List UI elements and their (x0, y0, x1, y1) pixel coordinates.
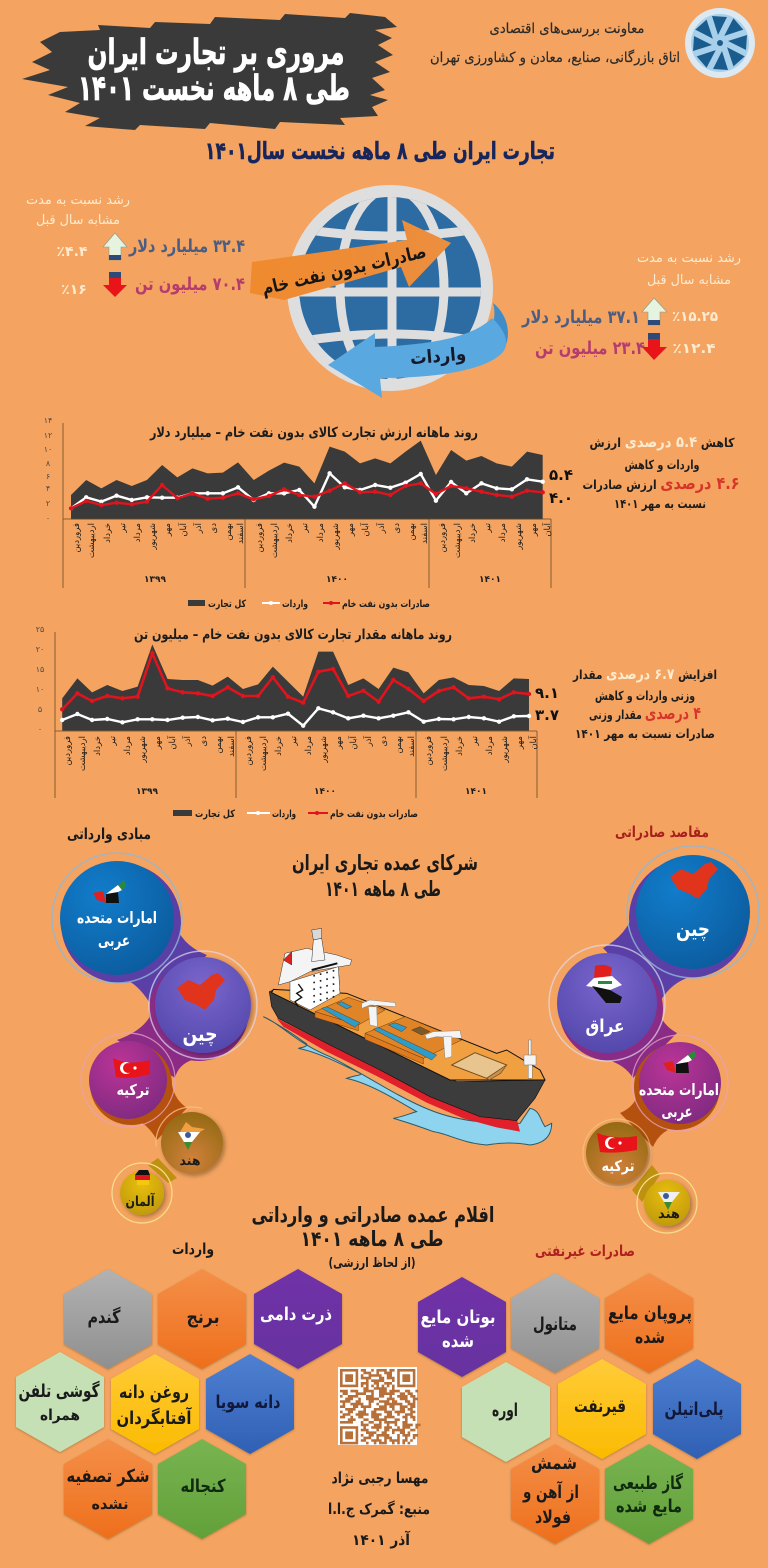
month labels: خرداد (455, 736, 465, 756)
y axis labels (44, 416, 52, 523)
month labels: اسفند (236, 523, 246, 544)
panel: import stats (521, 251, 741, 360)
panel: export stats: ۷۰.۴ میلیون تن (135, 274, 245, 295)
text block: value commentary: واردات و کاهش (624, 457, 700, 472)
bubble: Turkey: ترکیه (116, 1081, 150, 1099)
superstructure (278, 928, 352, 1010)
hexagon: raw sugar: نشده (92, 1495, 128, 1513)
panel: export stats: ٪۱۶ (61, 282, 87, 298)
text block: credits (328, 1469, 430, 1549)
heading: trade partners (292, 851, 478, 901)
heading: imports: واردات (172, 1240, 214, 1258)
heading: import sources: مبادی وارداتی (67, 825, 151, 843)
month labels: اسفند (407, 736, 417, 757)
month labels: خرداد (274, 736, 284, 756)
panel: import stats: ۳۷.۱ میلیارد دلار (521, 307, 640, 328)
y axis labels: ۲ (46, 499, 50, 508)
text block: credits: مهسا رجبی نژاد (332, 1469, 428, 1487)
arrow: imports (328, 303, 508, 398)
y axis labels: ۸ (46, 459, 51, 468)
panel: export stats (26, 193, 245, 298)
text block: credits: منبع: گمرک ج.ا.ا (328, 1500, 430, 1518)
hexagon: meal: کنجاله (180, 1476, 226, 1497)
month labels: بهمن (214, 736, 224, 754)
year labels: ۱۴۰۰ (314, 787, 336, 797)
panel: import hexagons (16, 1269, 342, 1539)
chart title: روند ماهانه ارزش تجارت کالای بدون نفت خام – میلیارد دلار (149, 425, 478, 441)
month labels: مرداد (498, 523, 508, 542)
chart: monthly trade value (44, 416, 573, 610)
month labels: شهریور (319, 736, 329, 764)
text block: credits: آذر ۱۴۰۱ (352, 1531, 411, 1549)
heading: trade partners: طی ۸ ماهه ۱۴۰۱ (325, 877, 441, 901)
bubble: UAE: امارات متحده (77, 908, 157, 927)
bubble: India (637, 1173, 697, 1233)
y axis labels: ۲۵ (36, 625, 44, 634)
month labels: مهر (153, 736, 163, 750)
month labels: خرداد (103, 523, 113, 543)
bubble: Turkey (583, 1119, 651, 1187)
icon: globe (280, 185, 500, 391)
year labels: ۱۳۹۹ (144, 575, 166, 585)
end values: ۵.۴ (549, 466, 573, 484)
month labels: آذر (181, 735, 193, 747)
bubble: UAE (632, 1035, 728, 1131)
hexagon: steel: شمش (531, 1453, 577, 1474)
bubble: India: هند (658, 1207, 680, 1222)
month labels: مرداد (485, 736, 495, 755)
chart title: روند ماهانه مقدار تجارت کالای بدون نفت خام – میلیون تن (134, 627, 452, 643)
month labels: اردیبهشت (78, 736, 88, 771)
month labels: مرداد (123, 736, 133, 755)
panel: export stats: رشد نسبت به مدت (26, 193, 130, 208)
text block: volume commentary: ۴ درصدی مقدار وزنی (589, 704, 701, 724)
y axis labels (36, 625, 44, 734)
month labels: فروردین (63, 736, 73, 766)
hexagon: mobile phone: همراه (40, 1406, 80, 1424)
hexagon: feed corn (254, 1269, 342, 1369)
legend: واردات (272, 809, 296, 820)
month labels: مهر (334, 736, 344, 750)
year labels (136, 787, 487, 797)
month labels: مرداد (316, 523, 326, 542)
year labels (144, 575, 501, 585)
text block: volume commentary: افزایش ۶.۷ درصدی مقدار (572, 665, 717, 683)
end values: ۴.۰ (549, 489, 573, 507)
hexagon: methanol: متانول (533, 1314, 577, 1335)
hexagon: sunflower oil (111, 1354, 199, 1454)
month labels: آذر (192, 522, 204, 534)
bubble: UAE (52, 853, 182, 983)
year labels: ۱۴۰۱ (479, 575, 501, 585)
text block: value commentary: ۴.۶ درصدی ارزش صادرات (582, 474, 740, 494)
month labels: مهر (515, 736, 525, 750)
hexagon: mobile phone: گوشی تلفن (18, 1380, 100, 1402)
month labels: بهمن (224, 523, 234, 541)
y axis labels: ۱۵ (36, 665, 44, 674)
month labels: مرداد (304, 736, 314, 755)
legend: صادرات بدون نفت خام (330, 809, 418, 820)
heading: top goods: طی ۸ ماهه ۱۴۰۱ (300, 1227, 444, 1251)
month labels: اردیبهشت (259, 736, 269, 771)
QR code (338, 1367, 421, 1445)
hexagon: meal (158, 1439, 246, 1539)
arrow: imports: واردات (409, 344, 467, 369)
month labels (72, 522, 553, 558)
bubble: Iraq (549, 945, 665, 1061)
text block: volume commentary: وزنی واردات و کاهش (595, 688, 695, 703)
hexagon: LNG: گاز طبیعی (613, 1472, 683, 1494)
panel: import source bubbles (52, 853, 257, 1223)
hexagon: feed corn: ذرت دامی (260, 1304, 332, 1325)
hexagon: steel (511, 1444, 599, 1544)
heading: top goods: (از لحاظ ارزشی) (328, 1256, 416, 1271)
month labels: خرداد (285, 523, 295, 543)
month labels: آبان (347, 735, 359, 750)
panel: import stats: ٪۱۵.۲۵ (672, 309, 718, 325)
title banner (22, 13, 397, 130)
y axis labels: ۱۰ (44, 445, 52, 454)
title banner: مروری بر تجارت ایران (88, 33, 344, 73)
hexagon: propane (605, 1273, 693, 1373)
hexagon: rice (158, 1269, 246, 1369)
bubble: China: چین (676, 917, 710, 941)
month labels: اردیبهشت (440, 736, 450, 771)
month labels: دی (199, 736, 209, 746)
hexagon: wheat: گندم (88, 1306, 121, 1328)
month labels: آبان (527, 735, 539, 750)
month labels: آذر (362, 735, 374, 747)
y axis labels: ۱۴ (44, 416, 52, 425)
month labels: مهر (163, 523, 173, 537)
heading: export destinations: مقاصد صادراتی (615, 823, 709, 841)
bubble: UAE: عربی (98, 931, 130, 950)
year labels: ۱۴۰۱ (465, 787, 487, 797)
bubble: India: هند (180, 1154, 200, 1169)
hexagon: polyethylene (653, 1359, 741, 1459)
month labels: دی (209, 523, 219, 533)
month labels: بهمن (407, 523, 417, 541)
month labels: شهریور (500, 736, 510, 764)
icon: down arrow (642, 333, 667, 360)
text block: value commentary: نسبت به مهر ۱۴۰۱ (614, 496, 706, 511)
chart: monthly trade volume (36, 625, 559, 820)
year labels: ۱۳۹۹ (136, 787, 158, 797)
month labels: فروردین (438, 523, 448, 553)
bubble: Germany: آلمان (126, 1192, 155, 1210)
month labels: آبان (359, 522, 371, 537)
end values: ۹.۱ (535, 684, 559, 702)
hexagon: propane: پروپان مایع (608, 1303, 692, 1324)
bubble: India (153, 1104, 231, 1182)
y axis labels: ۶ (46, 472, 50, 481)
hexagon: LNG: مایع شده (616, 1496, 682, 1517)
month labels: مهر (529, 523, 539, 537)
end values (535, 684, 559, 724)
illustration: cargo ship (263, 928, 552, 1145)
hexagon: butane: شده (442, 1331, 474, 1352)
month labels: شهریور (331, 523, 341, 551)
year labels: ۱۴۰۰ (326, 575, 348, 585)
month labels: شهریور (148, 523, 158, 551)
hexagon: raw sugar: شکر تصفیه (66, 1466, 150, 1487)
legend (188, 599, 430, 610)
panel: import stats: رشد نسبت به مدت (637, 251, 741, 266)
hexagon: methanol (511, 1273, 599, 1373)
hexagon: butane (418, 1277, 506, 1377)
hexagon: steel: فولاد (535, 1507, 571, 1528)
hexagon: LNG (605, 1444, 693, 1544)
title banner: طی ۸ ماهه نخست ۱۴۰۱ (78, 69, 350, 109)
month labels: فروردین (424, 736, 434, 766)
hexagon: propane: شده (635, 1327, 665, 1348)
panel: import stats: ۲۳.۴ میلیون تن (535, 338, 645, 359)
bubble: Germany (112, 1163, 172, 1223)
month labels: آذر (375, 522, 387, 534)
bubble: Turkey: ترکیه (602, 1157, 634, 1175)
bubble: China (149, 951, 257, 1059)
panel: export stats: ۳۲.۴ میلیارد دلار (128, 236, 245, 257)
bubble: China (627, 846, 759, 978)
heading: non-oil exports: صادرات غیرنفتی (535, 1242, 635, 1260)
month labels: تیر (289, 735, 299, 747)
heading: trade partners: شرکای عمده تجاری ایران (292, 851, 478, 875)
hexagon: polyethylene: پلی‌اتیلن (664, 1399, 724, 1420)
y axis labels: ۲۰ (36, 645, 44, 654)
end values (549, 466, 573, 507)
panel: export hexagons (418, 1273, 741, 1544)
hexagon: urea: اوره (492, 1400, 518, 1421)
month labels: اسفند (420, 523, 430, 544)
text block: volume commentary: صادرات نسبت به مهر ۱۴۰۱ (575, 726, 715, 741)
cranes (362, 1000, 462, 1058)
heading: top goods (252, 1203, 494, 1271)
text block: value commentary: کاهش ۵.۴ درصدی ارزش (590, 433, 735, 451)
month labels: تیر (300, 522, 310, 534)
hexagon: soybean: دانه سویا (216, 1392, 280, 1413)
month labels: مهر (346, 523, 356, 537)
y axis labels: ۵ (38, 705, 42, 714)
hexagon: rice: برنج (186, 1307, 220, 1328)
month labels: دی (392, 523, 402, 533)
month labels: فروردین (255, 523, 265, 553)
month labels: خرداد (468, 523, 478, 543)
month labels: اردیبهشت (453, 523, 463, 558)
containers (315, 997, 462, 1064)
hexagon: butane: بوتان مایع (420, 1307, 496, 1328)
month labels: خرداد (93, 736, 103, 756)
month labels: آبان (177, 522, 189, 537)
bubble: Iraq: عراق (586, 1016, 624, 1037)
bubble: China: چین (182, 1022, 218, 1046)
month labels: تیر (118, 522, 128, 534)
month labels: تیر (483, 522, 493, 534)
hexagon: wheat (64, 1269, 152, 1369)
icon: up arrow (103, 233, 127, 260)
y axis labels: ۴ (46, 484, 50, 493)
icon: up arrow (642, 298, 667, 325)
month labels: بهمن (394, 736, 404, 754)
hexagon: urea (462, 1362, 550, 1462)
legend: صادرات بدون نفت خام (342, 599, 430, 610)
month labels: مرداد (133, 523, 143, 542)
panel: import stats: ٪۱۲.۴ (672, 341, 716, 357)
hexagon: sunflower oil: آفتابگردان (116, 1406, 192, 1429)
text block: value commentary (582, 433, 740, 511)
month labels: آبان (541, 522, 553, 537)
month labels: شهریور (138, 736, 148, 764)
y axis labels: ۱۲ (44, 431, 52, 440)
month labels: اسفند (227, 736, 237, 757)
organization heading: معاونت بررسی‌های اقتصادی (490, 21, 644, 37)
hatch (452, 1053, 507, 1078)
arrow: exports: صادرات بدون نفت خام (260, 241, 428, 300)
month labels: شهریور (514, 523, 524, 551)
month labels: آبان (166, 735, 178, 750)
subtitle: تجارت ایران طی ۸ ماهه نخست سال۱۴۰۱ (205, 137, 555, 165)
month labels: اردیبهشت (87, 523, 97, 558)
month labels: اردیبهشت (270, 523, 280, 558)
month labels: فروردین (72, 523, 82, 553)
month labels (63, 735, 539, 771)
month labels: تیر (108, 735, 118, 747)
y axis labels: ۰ (46, 514, 50, 523)
icon: down arrow (103, 272, 127, 297)
organization heading (430, 21, 680, 66)
panel: export destination bubbles (549, 846, 759, 1233)
text block: volume commentary (572, 665, 717, 741)
hexagon: bitumen (558, 1359, 646, 1459)
hexagon: bitumen: قیرنفت (574, 1396, 626, 1417)
panel: import stats: مشابه سال قبل (647, 273, 731, 288)
bubble: UAE: امارات متحده (639, 1080, 719, 1099)
hexagon: raw sugar (64, 1439, 152, 1539)
end values: ۳.۷ (535, 706, 559, 724)
legend: کل تجارت (195, 809, 235, 820)
panel: export stats: مشابه سال قبل (36, 213, 120, 228)
legend (173, 809, 418, 820)
hexagon: soybean (206, 1354, 294, 1454)
organization heading: اتاق بازرگانی، صنایع، معادن و کشاورزی تهران (430, 49, 680, 66)
y axis labels: ۱۰ (36, 685, 44, 694)
legend: کل تجارت (208, 599, 246, 610)
hexagon: mobile phone (16, 1352, 104, 1452)
panel: export stats: ٪۴.۴ (57, 244, 88, 260)
hexagon: steel: از آهن و (522, 1480, 579, 1503)
y axis labels: ۰ (38, 725, 42, 734)
month labels: فروردین (244, 736, 254, 766)
heading: top goods: اقلام عمده صادراتی و وارداتی (252, 1203, 494, 1227)
legend: واردات (282, 599, 308, 610)
bubble: Turkey (81, 1033, 175, 1127)
bubble: UAE: عربی (662, 1102, 692, 1121)
hexagon: sunflower oil: روغن دانه (119, 1382, 189, 1403)
month labels: دی (379, 736, 389, 746)
month labels: تیر (470, 735, 480, 747)
icon: chamber logo (685, 8, 755, 78)
